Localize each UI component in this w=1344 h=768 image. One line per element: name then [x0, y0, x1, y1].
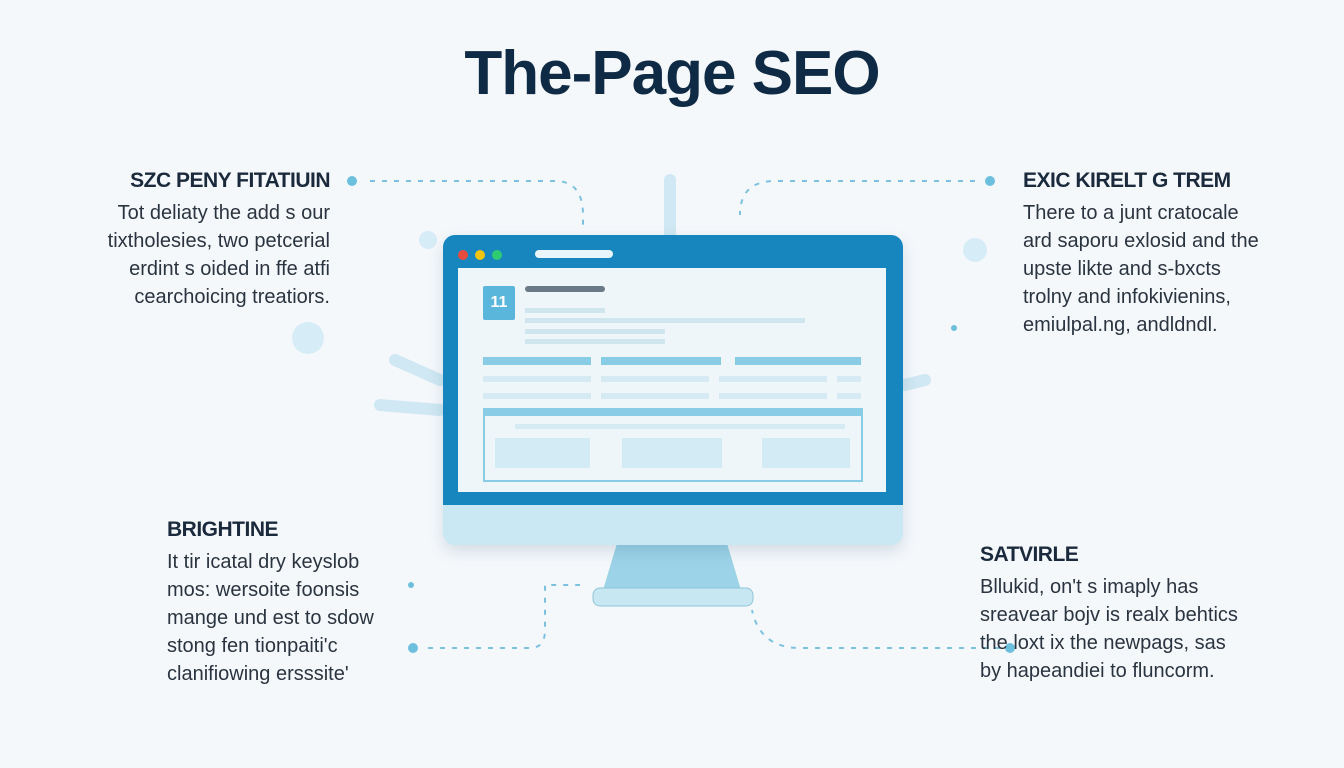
text: bottom right: sreavear bojv is realx behtics: [980, 604, 1238, 626]
text: top right: [1023, 169, 1259, 336]
screen: 11: [491, 294, 507, 311]
text: bottom right: Bllukid, on't s imaply has: [980, 576, 1198, 598]
stand: [592, 545, 754, 606]
text: top left: erdint s oided in ffe atfi: [129, 258, 330, 280]
text: bottom right: [980, 543, 1238, 682]
text: bottom right: by hapeandiei to fluncorm.: [980, 660, 1215, 682]
text: bottom left: mos: wersoite foonsis: [167, 579, 359, 601]
text: top right: ard saporu exlosid and the: [1023, 230, 1259, 252]
text: top right: trolny and infokivienins,: [1023, 286, 1231, 308]
text: bottom right: the loxt ix the newpags, sas: [980, 632, 1226, 654]
frame: [443, 235, 903, 545]
text: top right: EXIC KIRELT G TREM: [1023, 169, 1231, 192]
text: top left: cearchoicing treatiors.: [134, 286, 330, 308]
text: bottom left: BRIGHTINE: [167, 518, 278, 541]
screen: [458, 268, 886, 492]
text: top left: [108, 169, 330, 308]
monitor: [437, 235, 909, 606]
text: bottom left: It tir icatal dry keyslob: [167, 551, 359, 573]
text: bottom left: clanifiowing ersssite': [167, 663, 349, 685]
text: bottom right: SATVIRLE: [980, 543, 1078, 566]
text: bottom left: stong fen tionpaiti'c: [167, 635, 338, 657]
text: top left: SZC PENY FITATIUIN: [130, 169, 330, 192]
text: top left: Tot deliaty the add s our: [118, 202, 330, 224]
title: The-Page SEO: [464, 39, 880, 108]
window dots: [458, 250, 468, 260]
text: top right: upste likte and s-bxcts: [1023, 258, 1221, 280]
text: bottom left: [167, 518, 374, 685]
text: top right: emiulpal.ng, andldndl.: [1023, 314, 1218, 336]
text: top right: There to a junt cratocale: [1023, 202, 1239, 224]
text: bottom left: mange und est to sdow: [167, 607, 374, 629]
text: top left: tixtholesies, two petcerial: [108, 230, 330, 252]
